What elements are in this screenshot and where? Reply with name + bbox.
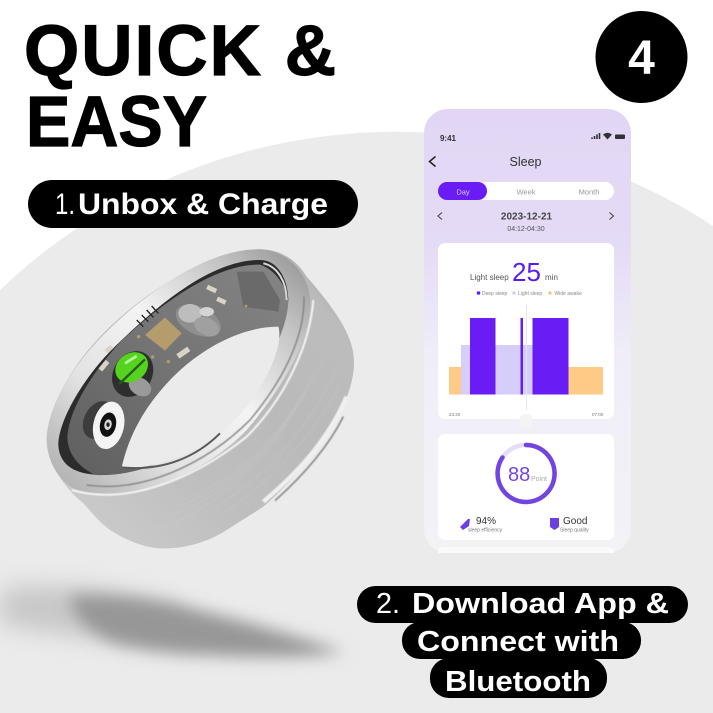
- step 2 label: Bluetooth: [445, 666, 591, 698]
- green LED sensor: [104, 344, 161, 404]
- sleep quality: Sleep quality: [560, 528, 589, 534]
- date row: [438, 212, 614, 233]
- step 2 label: 2.: [376, 588, 400, 620]
- ring shadow: [0, 585, 345, 657]
- sleep score card: [438, 434, 614, 540]
- step 1 label: [28, 180, 358, 228]
- chart legend: Light sleep: [518, 291, 542, 297]
- step number badge: 4: [628, 32, 655, 85]
- step 2 label: [357, 586, 688, 698]
- light sleep value: min: [545, 273, 558, 282]
- small components: [99, 285, 247, 413]
- title: QUICK &: [24, 12, 336, 91]
- sleep bar chart: 23:20: [449, 412, 461, 417]
- status bar: [440, 133, 625, 143]
- sleep quality: Good: [563, 516, 587, 527]
- chart legend: [477, 291, 582, 297]
- sleep bar chart: 07:00: [592, 412, 604, 417]
- next card stub: [438, 547, 614, 553]
- ring opening: [122, 327, 279, 468]
- sleep efficiency: 94%: [476, 516, 496, 527]
- sleep bar chart: [449, 305, 604, 417]
- circuit traces: [137, 306, 158, 327]
- phone app screen: [424, 109, 631, 553]
- step 1 label: Unbox & Charge: [78, 188, 328, 221]
- light sleep value: 25: [512, 257, 541, 287]
- tab selector: [438, 182, 614, 200]
- tab selector: Week: [516, 188, 536, 196]
- tab selector: Month: [579, 188, 599, 196]
- score ring: [498, 445, 555, 502]
- back arrow: [430, 156, 436, 166]
- light sleep value: [470, 257, 558, 287]
- chart legend: Deep sleep: [482, 291, 508, 297]
- clear sensor lens: [171, 298, 226, 343]
- gold chip: [145, 317, 182, 351]
- sleep efficiency: [460, 516, 503, 534]
- ring lip: [47, 249, 310, 495]
- brushed streaks: [150, 360, 340, 530]
- chart legend: Wide awake: [554, 291, 582, 297]
- status bar: 9:41: [440, 134, 457, 143]
- step 1 label: 1.: [55, 188, 75, 221]
- sleep quality: [550, 516, 589, 534]
- title: [24, 12, 336, 162]
- step 2 label: Download App &: [412, 588, 669, 620]
- screen title: Sleep: [510, 155, 542, 169]
- phone body: [424, 109, 631, 553]
- date row: 2023-12-21: [501, 212, 553, 222]
- score ring: 88: [508, 464, 530, 486]
- title: EASY: [26, 83, 207, 162]
- chart handle: [519, 414, 533, 428]
- step number badge: [596, 11, 688, 103]
- smart ring product: [47, 249, 354, 548]
- score ring: Point: [531, 476, 547, 483]
- light sleep value: Light sleep: [470, 273, 509, 282]
- step 2 label: Connect with: [417, 626, 619, 658]
- lower bevel highlight: [263, 397, 347, 502]
- sleep efficiency: sleep efficiency: [468, 528, 503, 534]
- ring inner surface: [58, 260, 288, 475]
- sleep chart card: [438, 243, 614, 428]
- date row: 04:12-04:30: [507, 226, 545, 233]
- tab selector: Day: [456, 188, 470, 196]
- ring band outer: [47, 249, 354, 548]
- charging contact: [77, 396, 129, 452]
